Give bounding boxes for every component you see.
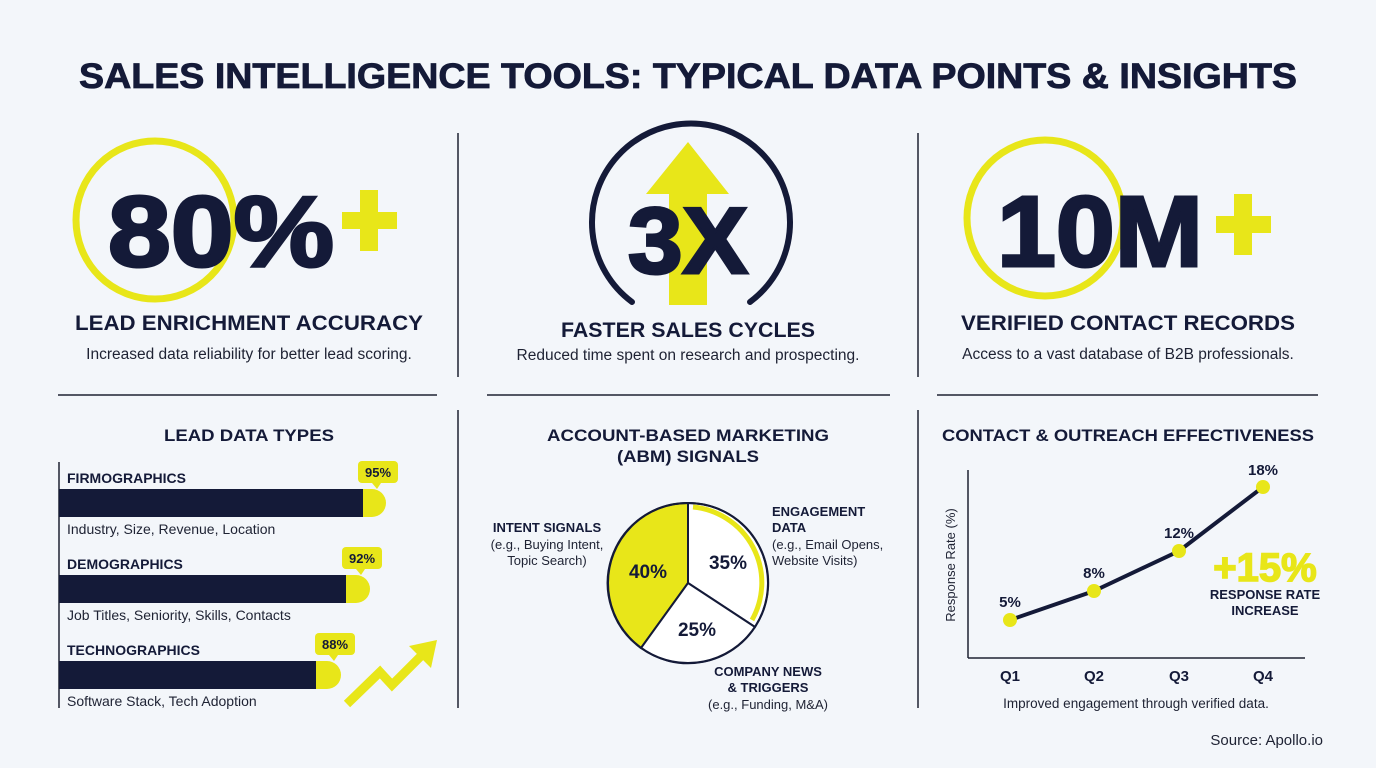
heading: LEAD DATA TYPES — [164, 426, 334, 445]
line chart — [943, 462, 1305, 685]
subtext: Reduced time spent on research and prospecting. — [517, 347, 859, 364]
bar: technographics: TECHNOGRAPHICS — [67, 642, 200, 658]
bar: firmographics: 95% — [365, 465, 391, 480]
line chart: Q1 — [1000, 668, 1020, 685]
icon: plus — [342, 190, 397, 251]
line chart: 5% — [999, 594, 1021, 611]
label: company news: (e.g., Funding, M&A) — [708, 697, 828, 712]
label: intent signals: INTENT SIGNALS — [493, 520, 601, 535]
icon: yellow ring — [76, 141, 234, 299]
bar: firmographics: FIRMOGRAPHICS — [67, 470, 186, 486]
label: company news — [708, 664, 828, 712]
heading: LEAD ENRICHMENT ACCURACY — [75, 312, 423, 335]
label: engagement data — [772, 504, 883, 568]
subtext: Access to a vast database of B2B professionals. — [962, 346, 1294, 363]
heading: CONTACT & OUTREACH EFFECTIVENESS — [942, 426, 1314, 445]
callout: +15%: RESPONSE RATE — [1210, 587, 1320, 602]
callout: +15% — [1210, 546, 1320, 618]
bar: demographics: DEMOGRAPHICS — [67, 556, 183, 572]
icon: yellow ring — [967, 140, 1123, 296]
bar: firmographics: Industry, Size, Revenue, Location — [67, 521, 275, 537]
caption: Improved engagement through verified data. — [1003, 696, 1269, 711]
label: engagement data: ENGAGEMENT — [772, 504, 865, 519]
icon: arc — [592, 124, 790, 302]
callout: +15%: INCREASE — [1231, 603, 1299, 618]
bar: demographics — [59, 547, 382, 623]
panel: contact & outreach effectiveness — [942, 426, 1320, 711]
line chart: 8% — [1083, 565, 1105, 582]
panel: ABM signals: (ABM) SIGNALS — [617, 447, 759, 466]
pie chart: 25% — [678, 620, 716, 641]
heading: FASTER SALES CYCLES — [561, 319, 815, 342]
line chart: Q4 — [1253, 668, 1274, 685]
line chart: Response Rate (%) — [943, 508, 958, 622]
callout: +15%: +15% — [1213, 546, 1317, 590]
bar: firmographics — [59, 461, 398, 537]
title: SALES INTELLIGENCE TOOLS: TYPICAL DATA POINTS & INSIGHTS — [79, 57, 1297, 96]
line chart: 18% — [1248, 462, 1278, 479]
icon: up arrow — [646, 142, 729, 305]
pie chart: 35% — [709, 553, 747, 574]
subtext: Increased data reliability for better lead scoring. — [86, 346, 412, 363]
heading: VERIFIED CONTACT RECORDS — [961, 312, 1295, 335]
bar: technographics: 88% — [322, 637, 348, 652]
bar: demographics: 92% — [349, 551, 375, 566]
label: engagement data: DATA — [772, 520, 807, 535]
stat: 10M: 10M — [997, 176, 1203, 288]
icon: trend arrow — [347, 640, 437, 704]
pie chart — [608, 503, 768, 663]
bar: demographics: Job Titles, Seniority, Skills, Contacts — [67, 607, 291, 623]
label: engagement data: Website Visits) — [772, 553, 858, 568]
label: company news: COMPANY NEWS — [714, 664, 822, 679]
line chart: Q3 — [1169, 668, 1189, 685]
label: intent signals: Topic Search) — [507, 553, 587, 568]
panel: verified contact records — [961, 140, 1295, 363]
label: engagement data: (e.g., Email Opens, — [772, 537, 883, 552]
panel: ABM signals — [491, 426, 883, 712]
bar: technographics — [59, 633, 355, 709]
pie chart: 40% — [629, 562, 667, 583]
stat: 80%+: 80% — [108, 176, 334, 288]
label: intent signals — [491, 520, 603, 568]
label: intent signals: (e.g., Buying Intent, — [491, 537, 603, 552]
icon: plus — [1216, 194, 1271, 255]
heading: ACCOUNT-BASED MARKETING — [547, 426, 829, 445]
stat: 3X: 3X — [628, 188, 748, 293]
source: Source: Apollo.io — [1210, 732, 1323, 749]
line chart: 12% — [1164, 525, 1194, 542]
panel: lead enrichment accuracy — [75, 141, 423, 363]
line chart: Q2 — [1084, 668, 1104, 685]
bar: technographics: Software Stack, Tech Adoption — [67, 693, 257, 709]
panel: faster sales cycles — [517, 124, 859, 364]
panel: lead data types — [59, 426, 437, 709]
label: company news: & TRIGGERS — [728, 680, 809, 695]
